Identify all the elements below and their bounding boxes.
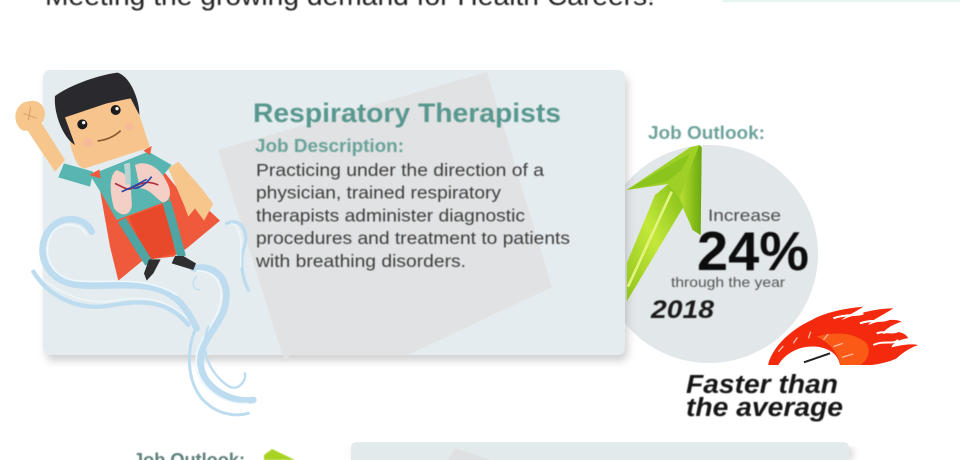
- decorative top right band: [722, 0, 960, 2]
- lungs: [111, 170, 132, 214]
- head: [64, 92, 150, 168]
- panel text: job description body: physician, trained respiratory: [256, 182, 501, 202]
- panel text: job description body: with breathing disorders.: [255, 251, 466, 271]
- icon: flaming speedometer: [768, 307, 918, 365]
- panel heading: respiratory therapists: Respiratory Therapists: [253, 98, 561, 128]
- other arm: [168, 162, 213, 221]
- stat label: through the year: through the year: [671, 274, 785, 290]
- shoes: [144, 259, 161, 281]
- arrow: next green arrow, cropped: [264, 449, 295, 460]
- stat year: 2018: [650, 296, 714, 324]
- panel subheading: job description: Job Description:: [255, 136, 404, 156]
- panel accent: grey tilted square: [218, 72, 552, 363]
- icon: superhero character with lungs: [15, 73, 253, 415]
- hair: [55, 73, 139, 145]
- mouth: [98, 131, 121, 141]
- eyes: [77, 119, 87, 129]
- circle: job outlook backdrop: [600, 145, 818, 363]
- stat number: 24%: [697, 220, 809, 282]
- callout: faster than the average: the average: [686, 394, 843, 422]
- callout: faster than the average: Faster than: [686, 371, 838, 399]
- stat: increase 24 percent: [650, 206, 809, 324]
- torso: [90, 152, 172, 220]
- panel text: job description body: Practicing under the direction of a: [256, 160, 544, 180]
- legs: [122, 220, 149, 263]
- panel text: job description body: procedures and treatment to patients: [256, 228, 570, 248]
- panel: respiratory therapists: [43, 70, 628, 363]
- label: job outlook: Job Outlook:: [648, 123, 765, 143]
- arrow: job outlook green up arrow: [627, 145, 702, 302]
- panel: next career, cropped: [351, 442, 852, 460]
- panel text: job description body: [255, 160, 570, 271]
- panel text: job description body: therapists administer diagnostic: [256, 206, 525, 226]
- raised arm: [26, 123, 65, 172]
- air swirls: [33, 219, 253, 415]
- stat label: increase: Increase: [708, 206, 781, 225]
- cape: [97, 167, 220, 281]
- callout: faster than the average: [686, 371, 843, 422]
